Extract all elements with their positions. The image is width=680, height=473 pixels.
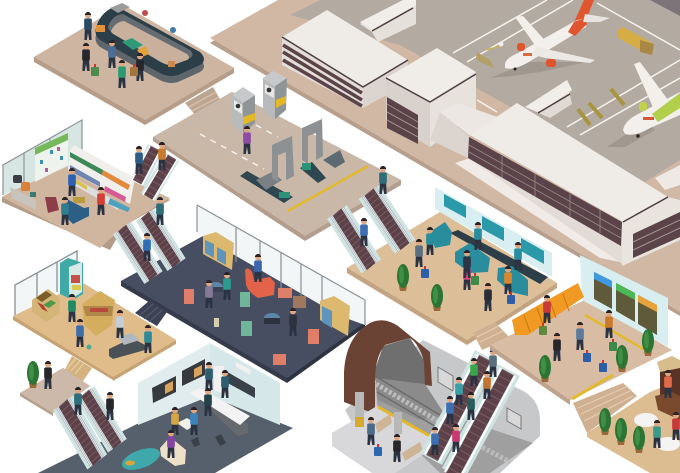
passport tower: right <box>263 71 287 119</box>
checkout counter: market <box>109 333 145 359</box>
panel: gate waiting area <box>490 255 672 405</box>
glass wall: shop <box>3 120 82 195</box>
tunnel wall <box>345 340 540 473</box>
fitting rooms: rear <box>203 232 234 270</box>
panel: cafe <box>38 343 293 473</box>
cafe wall: left <box>138 343 210 425</box>
brown tunnel arch <box>344 320 432 414</box>
people: fashion store <box>205 254 297 336</box>
wall signs <box>438 367 521 429</box>
round seats <box>209 282 280 324</box>
stairs: gate to restaurant <box>573 383 637 433</box>
people: baggage claim <box>82 12 144 88</box>
yellow lines: gate <box>572 315 645 399</box>
panel: check-in hall <box>347 187 557 345</box>
person: landing <box>44 361 52 389</box>
panel: produce market <box>13 251 176 381</box>
building: left terminal block <box>282 10 408 108</box>
restaurant booth <box>655 356 680 420</box>
lane dashes <box>200 125 278 169</box>
dining tables <box>177 418 226 447</box>
escalators: shop <box>131 142 179 201</box>
vehicle: fuel truck <box>618 27 654 55</box>
panel: restaurant <box>587 356 680 473</box>
airplane: green <box>607 62 680 147</box>
station platform <box>332 406 442 473</box>
person: purple passenger <box>243 126 251 154</box>
baggage carousel <box>96 3 204 83</box>
escalators: central <box>113 197 186 284</box>
orange seats <box>512 283 584 335</box>
people: central escalators <box>143 197 164 261</box>
airport ground band <box>210 0 680 316</box>
vehicle: belt loader <box>476 42 504 68</box>
side counter <box>10 175 36 210</box>
escalators: lower left <box>53 386 127 470</box>
canopy walkway <box>455 157 622 262</box>
panel: baggage claim <box>34 3 234 125</box>
produce crates <box>32 289 60 322</box>
panel: security checkpoint <box>153 71 401 241</box>
escalators: check-in access <box>327 166 415 274</box>
apron <box>290 0 680 182</box>
jetway: lower <box>525 80 572 118</box>
panel: fashion store floor <box>121 205 365 383</box>
people: shop escalators <box>135 142 166 174</box>
people: market <box>68 294 152 353</box>
plant: landing <box>27 361 39 388</box>
people: lower left escalators <box>74 387 114 420</box>
metal detector: left <box>240 136 294 203</box>
glass railing: market <box>15 251 77 315</box>
service counter <box>190 366 250 436</box>
benches <box>375 414 423 461</box>
passport tower: left <box>232 87 255 133</box>
fridge <box>60 258 83 300</box>
red sofa <box>245 268 275 298</box>
people: train escalators <box>431 349 497 455</box>
panel: retail shop <box>2 120 170 250</box>
product shelves <box>68 145 135 212</box>
people: cafe <box>167 362 229 458</box>
gate wall <box>580 255 668 347</box>
people: gate <box>539 295 617 372</box>
metal detector: right <box>300 119 345 183</box>
jetway: right <box>655 165 680 190</box>
stairs: market to landing <box>63 356 92 381</box>
check-in desks <box>430 222 528 296</box>
platform columns <box>355 392 402 434</box>
restaurant tables <box>634 413 680 451</box>
yellow floor line <box>288 166 368 211</box>
panel: landing <box>20 361 90 416</box>
plants: check-in <box>397 264 443 311</box>
stairs: check-in to gate <box>473 322 510 350</box>
teal rug <box>119 444 163 473</box>
baggage belt <box>450 230 548 284</box>
lounge armchair <box>160 437 186 466</box>
fitting rooms: front <box>320 296 350 336</box>
escalators: train station <box>420 349 520 473</box>
jetway: upper <box>360 0 416 42</box>
cafe wall: right <box>210 343 280 425</box>
check-in wall <box>435 187 552 277</box>
people: check-in escalators <box>360 166 387 246</box>
people: platform <box>367 417 401 462</box>
panel: train station tunnel <box>332 320 540 473</box>
plants: restaurant <box>599 408 645 453</box>
airplane: red tail <box>490 0 610 78</box>
checkout counter <box>45 197 89 224</box>
terminal building <box>430 103 680 266</box>
building: central block <box>386 48 476 147</box>
stairs: fashion store <box>135 300 167 326</box>
people: check-in <box>415 222 522 311</box>
people: shop <box>61 168 105 225</box>
track bed <box>375 338 533 473</box>
people: restaurant <box>653 370 680 448</box>
clothing racks <box>184 288 319 365</box>
boarding stairs <box>578 89 624 125</box>
glass wall: fashion store <box>197 205 365 325</box>
plants: gate <box>539 329 654 382</box>
product display <box>82 291 115 336</box>
stairs: baggage claim <box>185 87 222 117</box>
